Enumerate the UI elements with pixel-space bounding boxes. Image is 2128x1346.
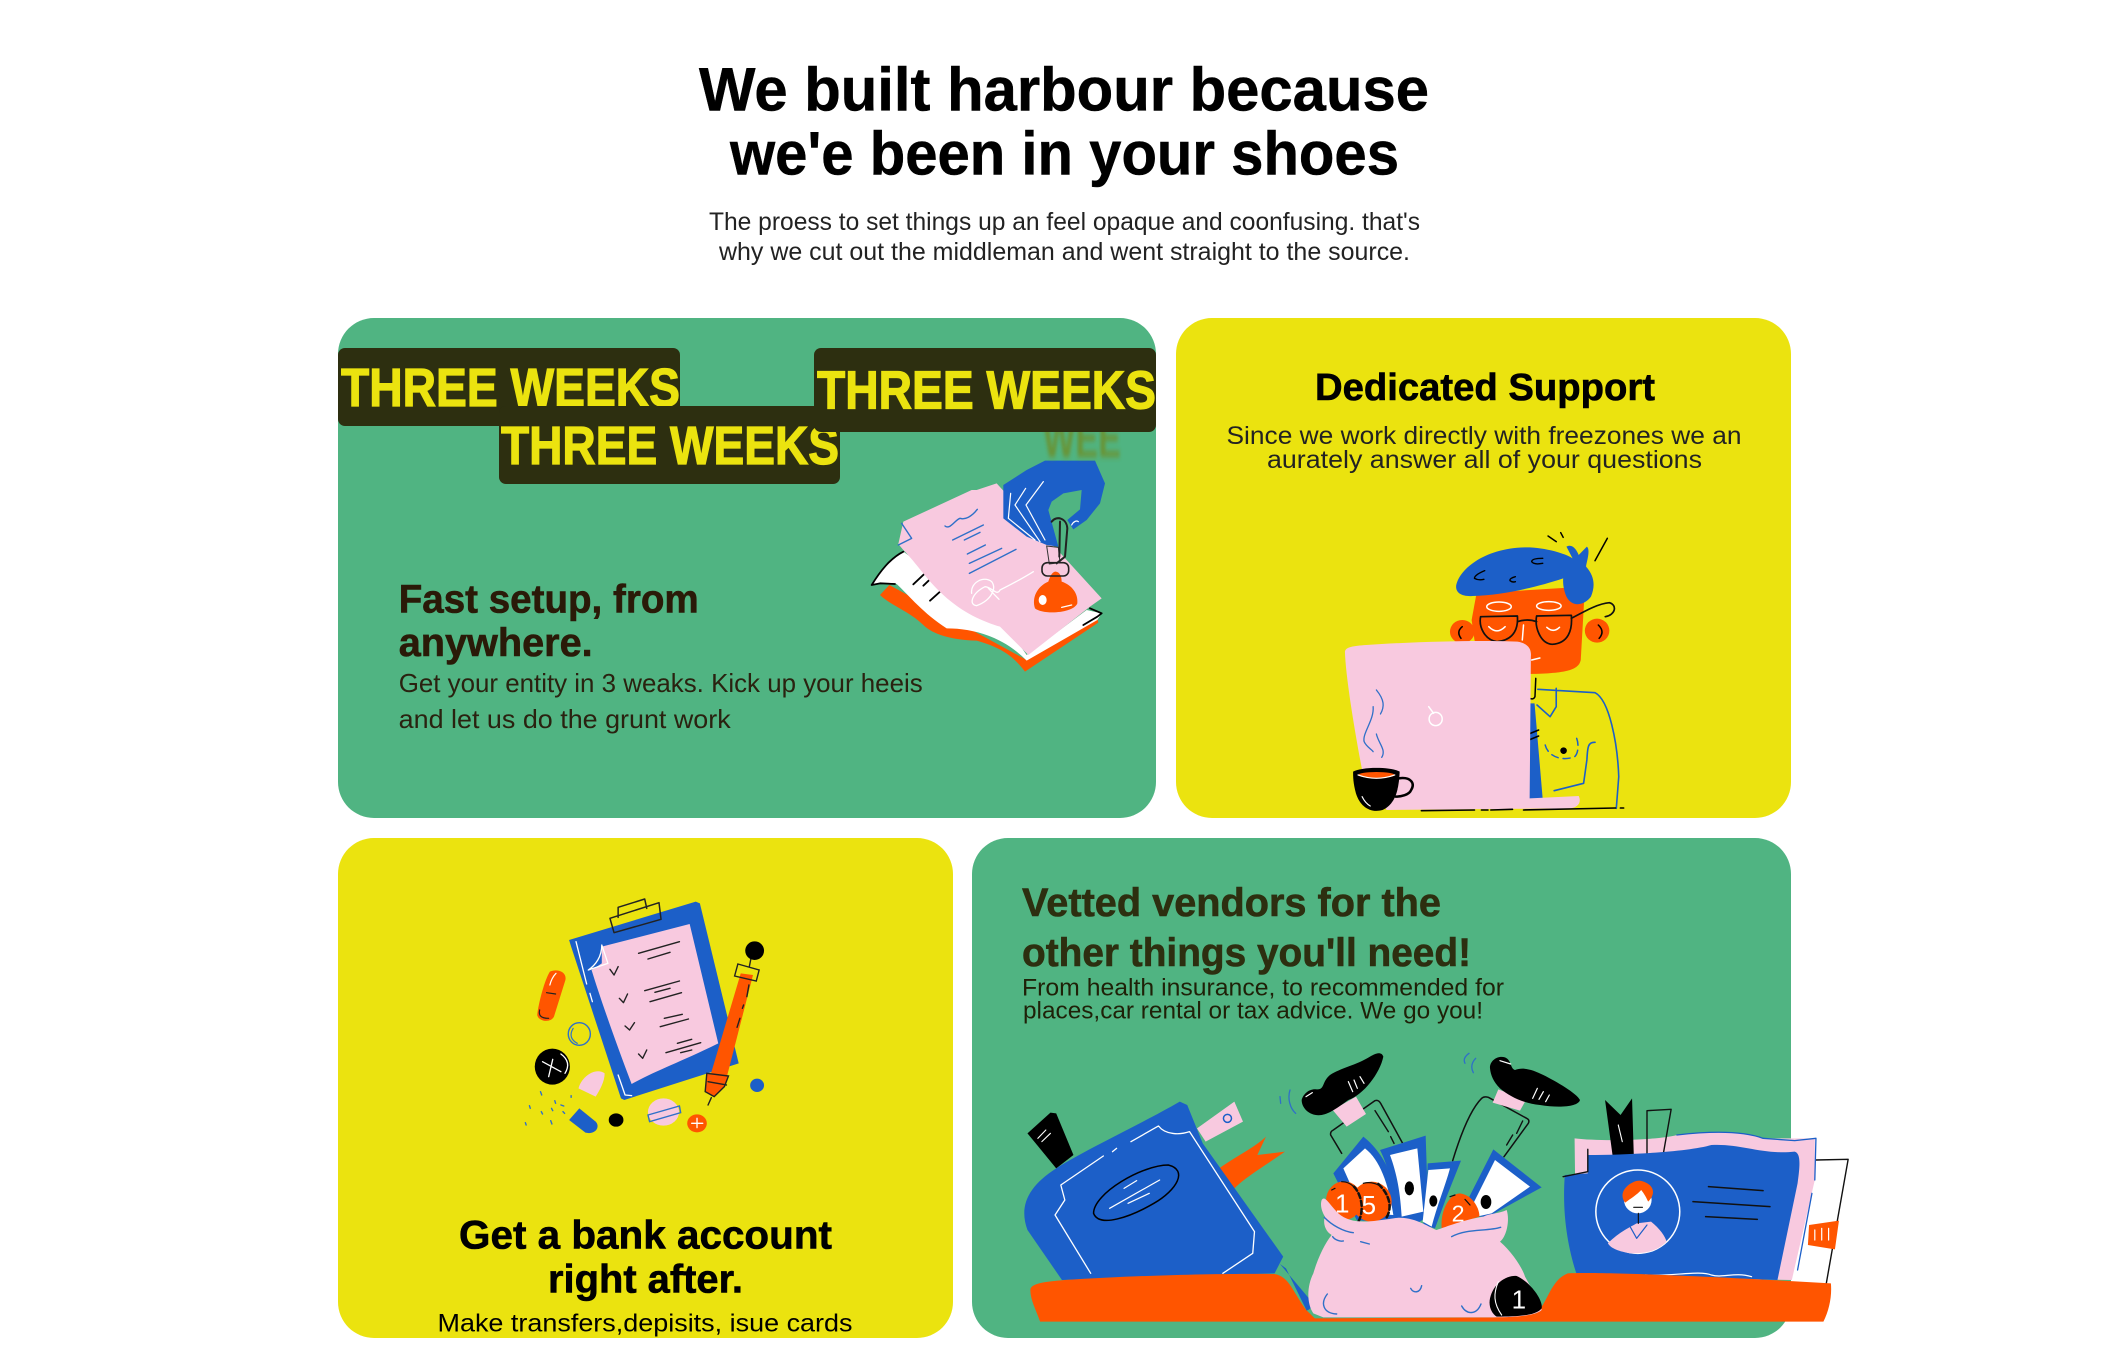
heading: fast setup: [399, 578, 699, 665]
heading: vetted vendors: Vetted vendors for the: [1022, 881, 1441, 925]
body text: dedicated support: aurately answer all of your questions: [1267, 446, 1702, 474]
heading: fast setup: Fast setup, from: [399, 578, 699, 622]
icon: passport, id card and orange tray: [1024, 1098, 1848, 1322]
three weeks highlight left: THREE WEEKS: [341, 358, 680, 418]
panel: dedicated support: [1176, 318, 1791, 818]
body text: dedicated support: Since we work directly with freezones we an: [1226, 422, 1742, 450]
body text: vetted vendors: places,car rental or tax advice. We go you!: [1023, 997, 1483, 1024]
body text: bank account: Make transfers,depisits, isue cards: [438, 1310, 852, 1338]
icon: money bag with legs, banknotes and coins: 1: [1512, 1284, 1526, 1314]
heading: dedicated support: Dedicated Support: [1315, 367, 1655, 409]
subtitle text: The proess to set things up an feel opaque and coonfusing. that's: [709, 208, 1420, 236]
three weeks highlight right: [814, 348, 1156, 432]
heading: bank account: Get a bank account: [459, 1214, 832, 1258]
three weeks highlight middle: [499, 406, 840, 484]
heading: bank account: [459, 1214, 832, 1302]
icon: money bag with legs, banknotes and coins: 2: [1452, 1201, 1465, 1227]
three weeks highlight middle: THREE WEEKS: [501, 416, 839, 476]
blurred ghost text: WEE: [1043, 409, 1121, 469]
panel: fast setup: [338, 318, 1156, 818]
body text: fast setup: Get your entity in 3 weaks. Kick up your heeis: [399, 668, 923, 698]
icon: signing document with ink bottle: [872, 461, 1105, 672]
heading: bank account: right after.: [548, 1258, 743, 1302]
three weeks highlight right: THREE WEEKS: [817, 360, 1156, 420]
panel: vetted vendors: [972, 838, 1848, 1338]
title: [699, 56, 1429, 188]
title: we'e been in your shoes: [729, 120, 1399, 188]
heading: fast setup: anywhere.: [399, 621, 593, 665]
icon: man at laptop with coffee: [1345, 533, 1624, 811]
icon: money bag with legs, banknotes and coins: 5: [1362, 1190, 1376, 1220]
subtitle text: [709, 208, 1420, 266]
title: We built harbour because: [699, 56, 1429, 124]
body text: dedicated support: [1226, 422, 1742, 474]
heading: vetted vendors: [1022, 881, 1471, 975]
subtitle text: why we cut out the middleman and went straight to the source.: [718, 238, 1410, 266]
icon: money bag with legs, banknotes and coins: 1: [1335, 1188, 1349, 1218]
body text: fast setup: and let us do the grunt work: [399, 704, 732, 734]
body text: fast setup: [399, 668, 923, 734]
body text: vetted vendors: From health insurance, to recommended for: [1022, 975, 1504, 1002]
body text: vetted vendors: [1022, 975, 1504, 1024]
icon: clipboard, pen and pills: [525, 899, 764, 1133]
panel: bank account: [338, 838, 953, 1338]
heading: vetted vendors: other things you'll need!: [1022, 931, 1471, 975]
three weeks highlight left: [338, 348, 680, 426]
icon: money bag with legs, banknotes and coins: [1280, 1053, 1580, 1317]
